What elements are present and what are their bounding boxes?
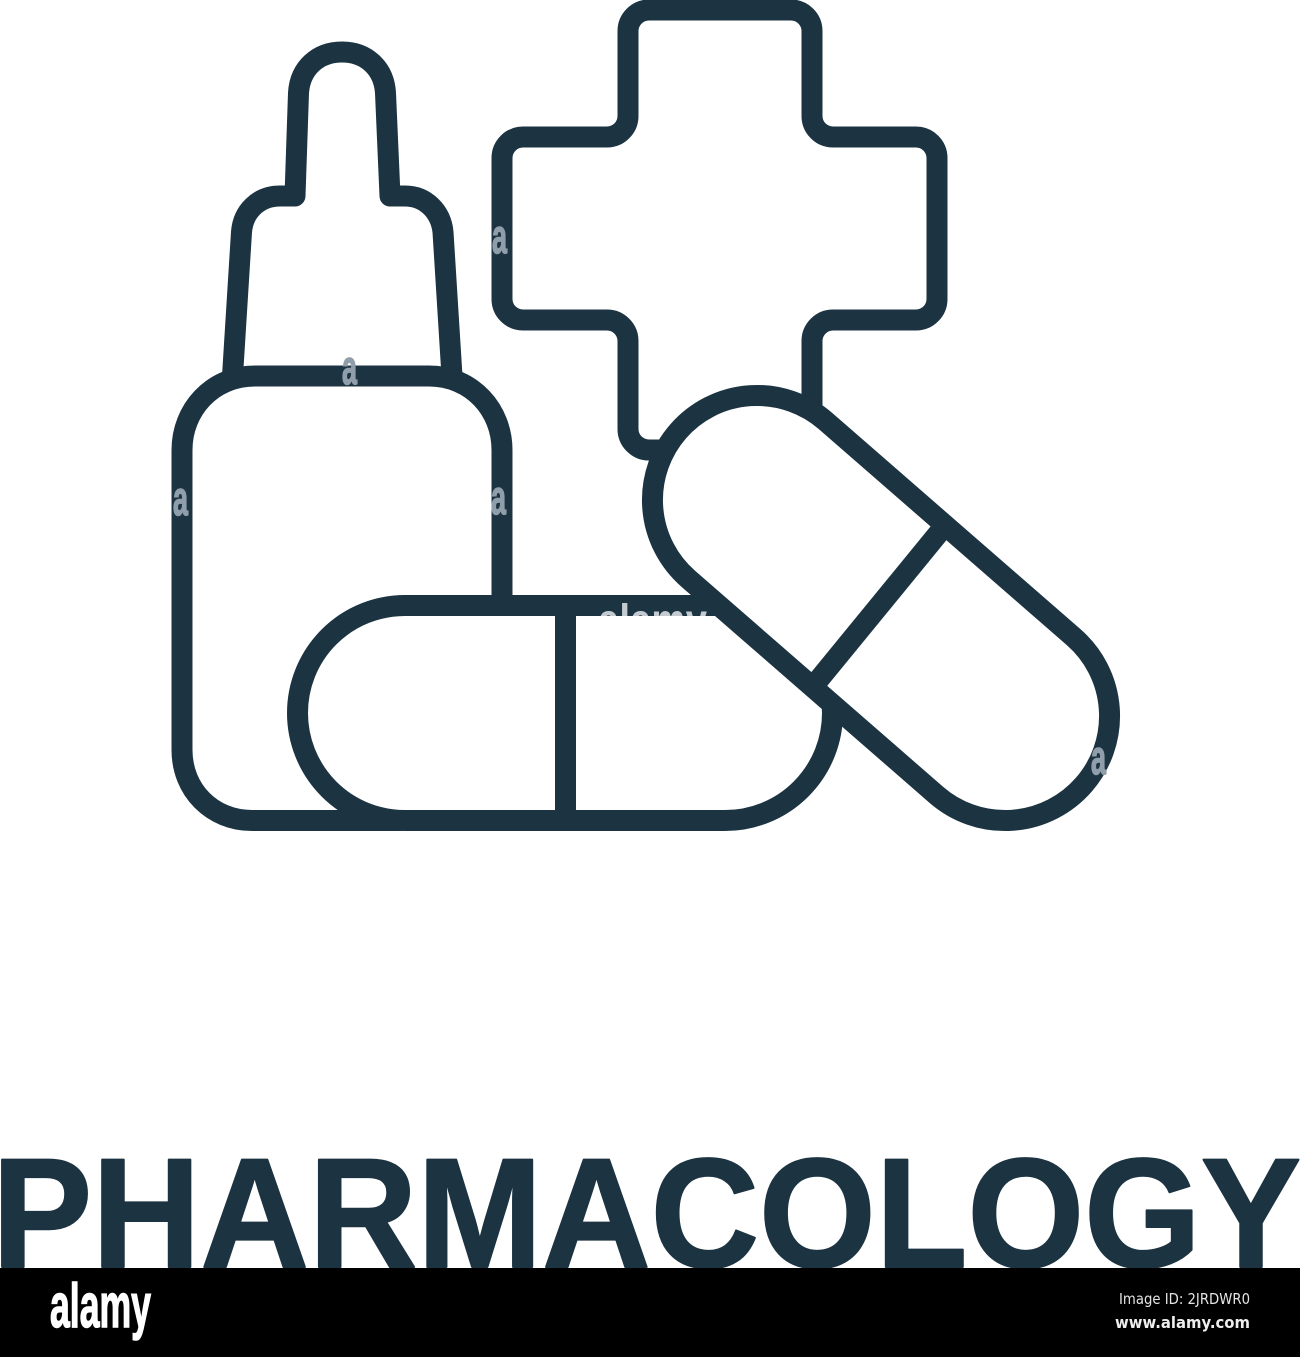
watermark: alamy marks on icon: a [1091,732,1106,785]
image id: Image ID: 2JRDWR0 [1119,1290,1250,1308]
bottle body [182,376,502,820]
watermark: alamy marks on icon: a [342,342,357,395]
icon: diagonal capsule [652,395,1110,821]
logo: alamy: alamy [50,1272,151,1341]
watermark: alamy marks on icon: alamy [598,595,707,648]
watermark: alamy marks on icon: a [173,473,188,526]
bottle cap and dropper [232,52,452,376]
watermark: alamy marks on icon: a [492,211,507,264]
icon: dropper bottle [182,52,502,820]
website: www.alamy.com [1115,1313,1250,1332]
icon: medical cross [502,10,937,450]
footer bar [0,1268,1300,1357]
watermark: alamy marks on icon [173,211,1106,785]
icon: pharmacology line icon [182,10,1110,821]
watermark: alamy marks on icon: a [491,472,506,525]
icon: horizontal capsule [298,606,832,820]
